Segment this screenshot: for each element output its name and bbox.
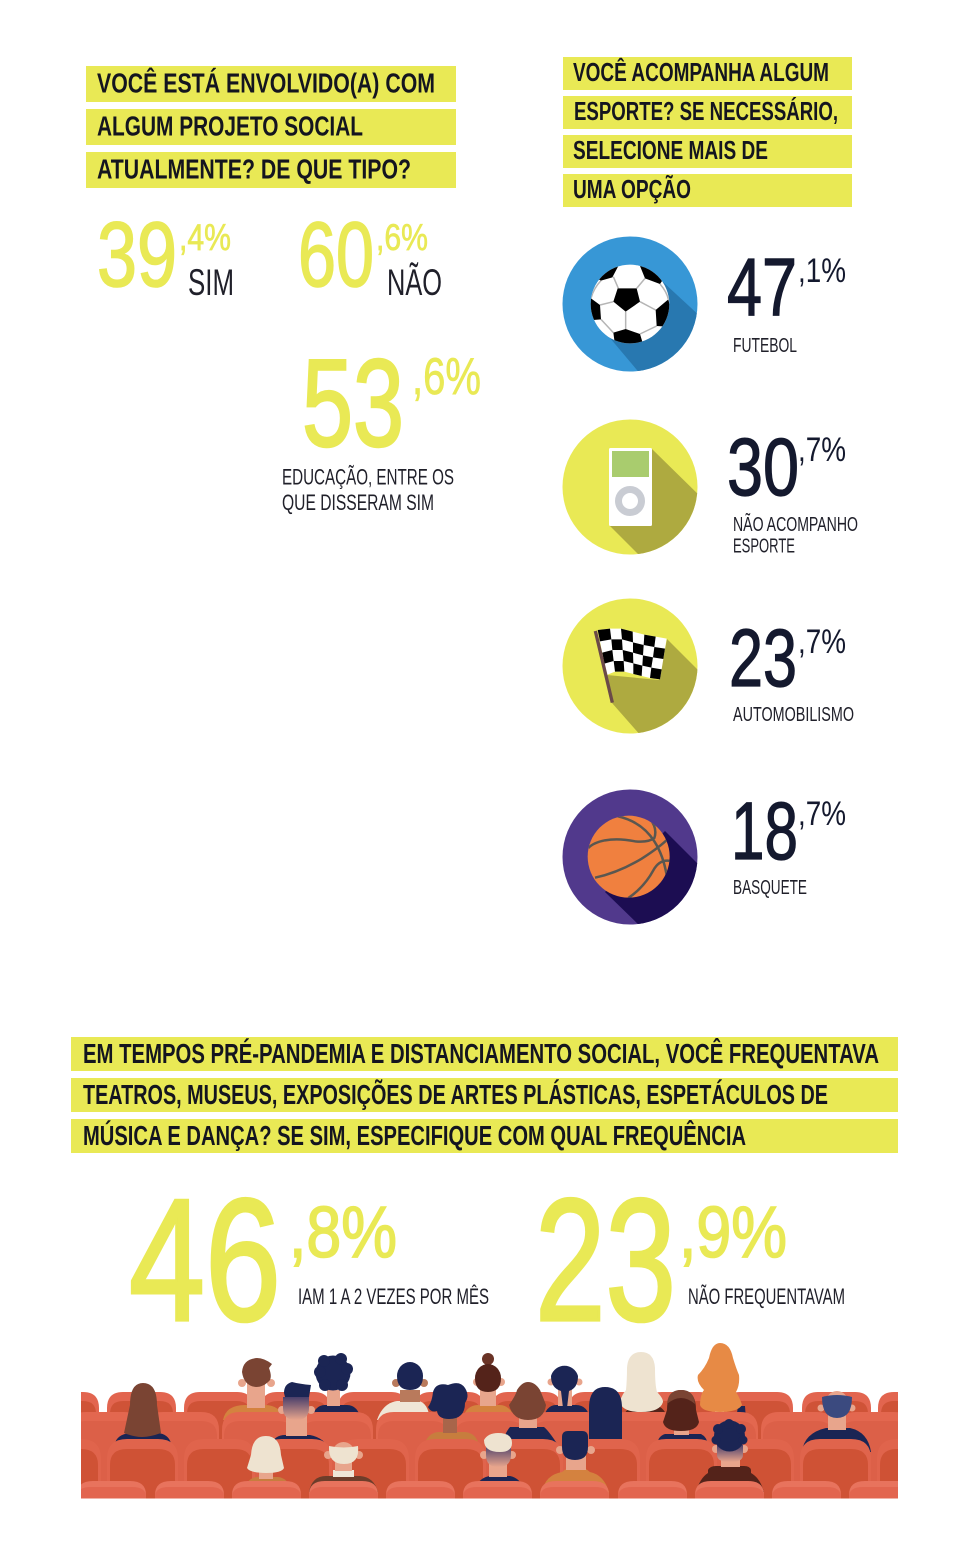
stat: 23,9% não frequentavam: NÃO FREQUENTAVAM	[688, 1284, 845, 1309]
person: blonde bob woman	[247, 1436, 286, 1481]
stat: 60,6% não: ,6%	[376, 217, 428, 258]
stat: 53,6% educação	[282, 335, 481, 515]
person: curly navy-haired woman with orange shirt	[426, 1383, 478, 1442]
stat: 30,7% não acompanho esporte: 30	[727, 422, 799, 513]
heading: sports question: SELECIONE MAIS DE	[573, 135, 768, 165]
person: brown bob woman	[658, 1390, 707, 1441]
stat: 23,7% automobilismo: AUTOMOBILISMO	[733, 704, 854, 726]
person: brown-haired man	[223, 1358, 278, 1420]
stat: 30,7% não acompanho esporte: ESPORTE	[733, 536, 795, 558]
person: navy quiff man	[274, 1382, 324, 1442]
stat: 47,1% futebol: ,1%	[798, 252, 846, 290]
icon: basketball	[562, 790, 702, 930]
stat: 23,7% automobilismo: ,7%	[798, 623, 846, 661]
stat: 23,9% não frequentavam: ,9%	[679, 1193, 787, 1273]
icon: soccer ball	[562, 236, 702, 380]
person: woman with long brown hair	[115, 1383, 171, 1443]
stat: 18,7% basquete	[731, 786, 846, 899]
stat: 30,7% não acompanho esporte	[727, 422, 858, 558]
person: curly navy hair	[314, 1353, 358, 1412]
person: blonde long hair	[621, 1352, 665, 1412]
stat: 46,8% iam 1 a 2 vezes por mês: IAM 1 A 2 VEZES POR MÊS	[298, 1284, 489, 1309]
person: navy ponytail	[546, 1366, 588, 1412]
heading: social project question	[86, 66, 456, 188]
stat: 23,9% não frequentavam	[535, 1162, 845, 1357]
stat: 39,4% sim: 39	[97, 204, 177, 306]
person: woman with hair bun	[465, 1353, 512, 1413]
illustration: theatre audience	[81, 1343, 898, 1498]
stat: 47,1% futebol: 47	[727, 242, 797, 333]
stat: 53,6% educação: 53	[302, 335, 404, 473]
stat: 46,8% iam 1 a 2 vezes por mês: 46	[129, 1162, 281, 1357]
stat: 30,7% não acompanho esporte: ,7%	[798, 431, 846, 469]
heading: cultural attendance question	[71, 1037, 898, 1153]
stat: 47,1% futebol	[727, 242, 846, 357]
heading: sports question: VOCÊ ACOMPANHA ALGUM	[573, 57, 829, 87]
person: orange long hair	[698, 1343, 746, 1412]
heading: social project question: VOCÊ ESTÁ ENVOLVIDO(A) COM	[97, 68, 435, 98]
icon: music player	[562, 420, 702, 560]
front row seats	[81, 1481, 898, 1498]
middle row seats	[81, 1412, 898, 1481]
back row seats	[81, 1392, 898, 1439]
stat: 30,7% não acompanho esporte: NÃO ACOMPANHO	[733, 512, 858, 536]
stat: 23,9% não frequentavam: 23	[535, 1162, 676, 1357]
stat: 18,7% basquete: ,7%	[798, 795, 846, 833]
heading: social project question: ATUALMENTE? DE QUE TIPO?	[97, 154, 411, 184]
icon: checkered flag	[562, 598, 702, 740]
person: balding man	[802, 1391, 871, 1452]
stat: 60,6% não: 60	[298, 204, 374, 306]
person: grey-haired man	[480, 1433, 520, 1482]
stat: 23,7% automobilismo	[729, 613, 854, 726]
stat: 39,4% sim: ,4%	[179, 217, 231, 258]
stat: 53,6% educação: ,6%	[412, 348, 481, 406]
person: curly navy-haired man with brown jacket	[696, 1419, 764, 1492]
stat: 46,8% iam 1 a 2 vezes por mês: ,8%	[289, 1193, 397, 1273]
heading: sports question: UMA OPÇÃO	[573, 174, 691, 204]
stat: 18,7% basquete: 18	[731, 786, 798, 877]
stat: 47,1% futebol: FUTEBOL	[733, 335, 797, 357]
person: navy-haired man with orange shirt	[542, 1431, 609, 1492]
third row seats	[81, 1439, 898, 1498]
stat: 23,7% automobilismo: 23	[729, 613, 797, 704]
stat: 18,7% basquete: BASQUETE	[733, 877, 807, 899]
stat: 53,6% educação: QUE DISSERAM SIM	[282, 490, 434, 515]
heading: social project question: ALGUM PROJETO SOCIAL	[97, 110, 363, 142]
heading: sports question: ESPORTE? SE NECESSÁRIO,	[574, 96, 838, 126]
stat: 46,8% iam 1 a 2 vezes por mês	[129, 1162, 489, 1357]
person: white-haired man	[309, 1442, 378, 1492]
person: short-haired man with cream shirt	[377, 1362, 430, 1420]
stat: 39,4% sim: SIM	[188, 262, 234, 303]
heading: sports question	[563, 57, 852, 207]
person: man with brown hair	[506, 1382, 556, 1443]
person: long navy hair	[589, 1387, 622, 1439]
stat: 60,6% não: NÃO	[387, 262, 442, 303]
stat: 53,6% educação: EDUCAÇÃO, ENTRE OS	[282, 464, 454, 490]
